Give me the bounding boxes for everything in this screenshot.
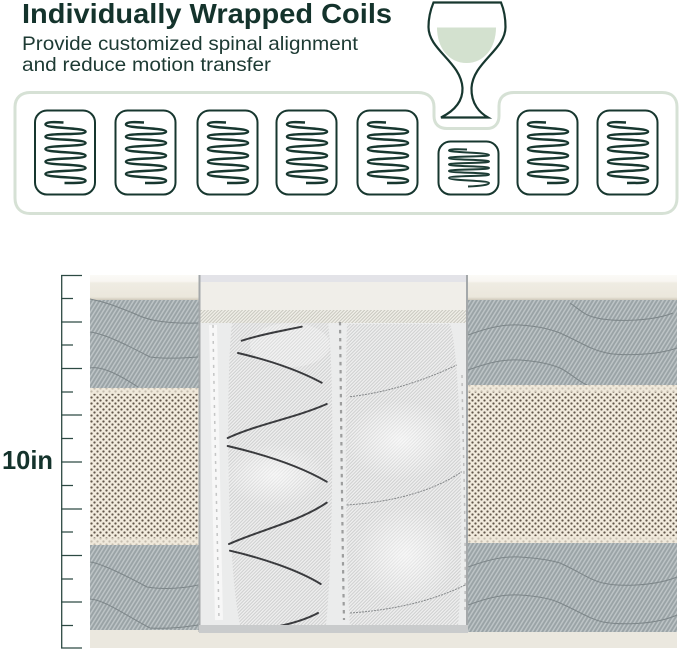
top foam layer [199,275,468,282]
window background [199,275,468,633]
coil 2 [116,110,176,194]
right wrapped coil pocket [346,324,461,626]
top quilted foam [468,300,677,385]
coil 7 [598,110,658,194]
panel: coil comparison outline [15,92,677,214]
mattress left section [90,275,199,648]
mesh band [468,385,677,543]
bottom quilted foam [90,545,199,630]
bottom cream border [90,630,199,648]
subtitle text block: Provide customized spinal alignment [22,33,359,55]
faint right coil wire [347,365,465,613]
hatched fabric band [199,310,468,323]
height label: 10in [2,445,53,475]
compressed coil [438,142,498,194]
mesh band [90,388,199,545]
top cream border [468,275,677,300]
mattress right section [468,275,677,648]
cutaway window with wrapped coils [199,275,468,633]
bottom cream border [468,632,677,648]
top cream border [90,275,199,300]
coil row [35,110,658,194]
wine fill [437,28,496,63]
subtitle text block: and reduce motion transfer [22,54,272,76]
left wrapped coil pocket [228,323,332,625]
subtitle text block [22,33,359,76]
bottom cream strip under cutaway [199,632,468,648]
coil 5 [358,110,418,194]
coil 3 [198,110,258,194]
bottom quilted foam [468,543,677,632]
height ruler [61,275,82,648]
coil 6 [518,110,578,194]
window frame [200,275,467,632]
coil 4 [276,110,336,194]
pocket seams [213,325,219,620]
top quilted foam [90,300,199,388]
icon: wine glass [428,2,506,118]
glass outline [428,2,506,118]
coil 1 [35,110,95,194]
visible left coil wire [228,327,327,627]
